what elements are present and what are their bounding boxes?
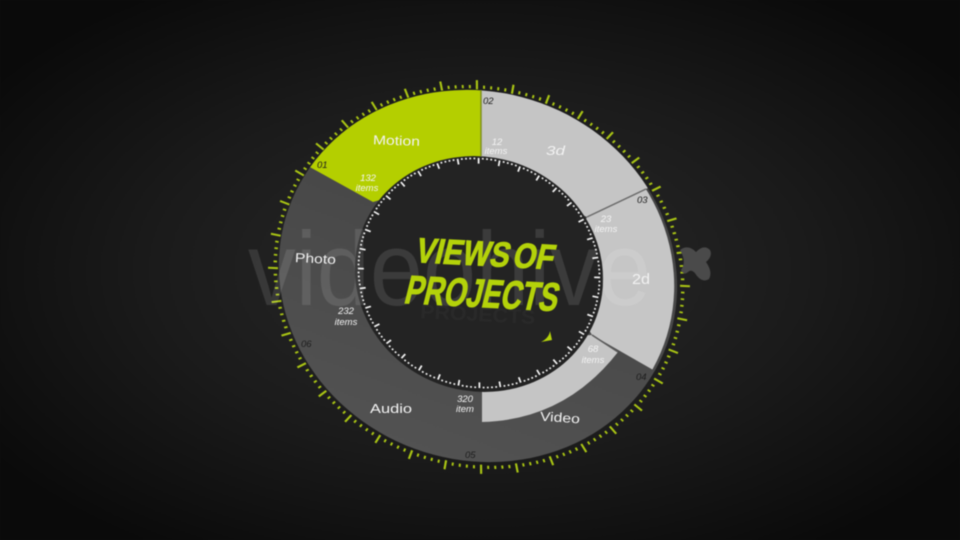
infographic canvas (133, 74, 826, 475)
segment labels: 3d (546, 143, 566, 158)
segment labels: Audio (370, 401, 412, 416)
segment index numbers (301, 96, 648, 461)
outer tick ring (244, 50, 714, 504)
title (401, 232, 565, 320)
item counts: items (335, 317, 358, 328)
divider: 3d and 2d (587, 189, 646, 217)
item counts: item (456, 404, 474, 415)
item counts: items (595, 224, 618, 235)
watermark: videohive (248, 211, 651, 328)
item counts: items (485, 146, 508, 157)
item counts: 23 (600, 214, 612, 225)
title reflection: PROJECTS (420, 301, 536, 329)
segment labels: 2d (632, 271, 650, 288)
segment labels: Photo (295, 250, 336, 267)
pointer icon (541, 331, 552, 342)
segment index numbers: 03 (637, 195, 648, 206)
segment index numbers: 06 (301, 339, 312, 350)
ring: dark base (226, 34, 730, 518)
item counts: 232 (337, 306, 355, 317)
segment index numbers: 04 (636, 372, 647, 383)
divider: 2d and Video (592, 335, 618, 352)
segment index numbers: 01 (317, 160, 328, 171)
item counts: items (356, 183, 379, 194)
item counts: items (582, 355, 605, 366)
segment: Motion (310, 89, 482, 202)
item counts: 12 (492, 137, 503, 148)
segment labels: Motion (373, 132, 420, 149)
item counts (335, 137, 618, 415)
segment: 3d (480, 90, 648, 218)
watermark logo (680, 247, 711, 280)
segment labels: Video (539, 409, 580, 426)
segment index numbers: 02 (483, 96, 494, 107)
segment labels (295, 132, 650, 426)
segment: 2d (586, 189, 675, 370)
title: VIEWS OF (412, 232, 559, 277)
inner tick ring (345, 141, 613, 405)
item counts: 320 (457, 394, 474, 405)
item counts: 68 (588, 344, 599, 355)
divider: Motion and 3d (480, 90, 482, 156)
segment index numbers: 05 (465, 450, 476, 461)
item counts: 132 (360, 173, 377, 184)
segment: Video (482, 335, 618, 422)
title: PROJECTS (401, 267, 565, 320)
inner dark disc (322, 121, 636, 427)
